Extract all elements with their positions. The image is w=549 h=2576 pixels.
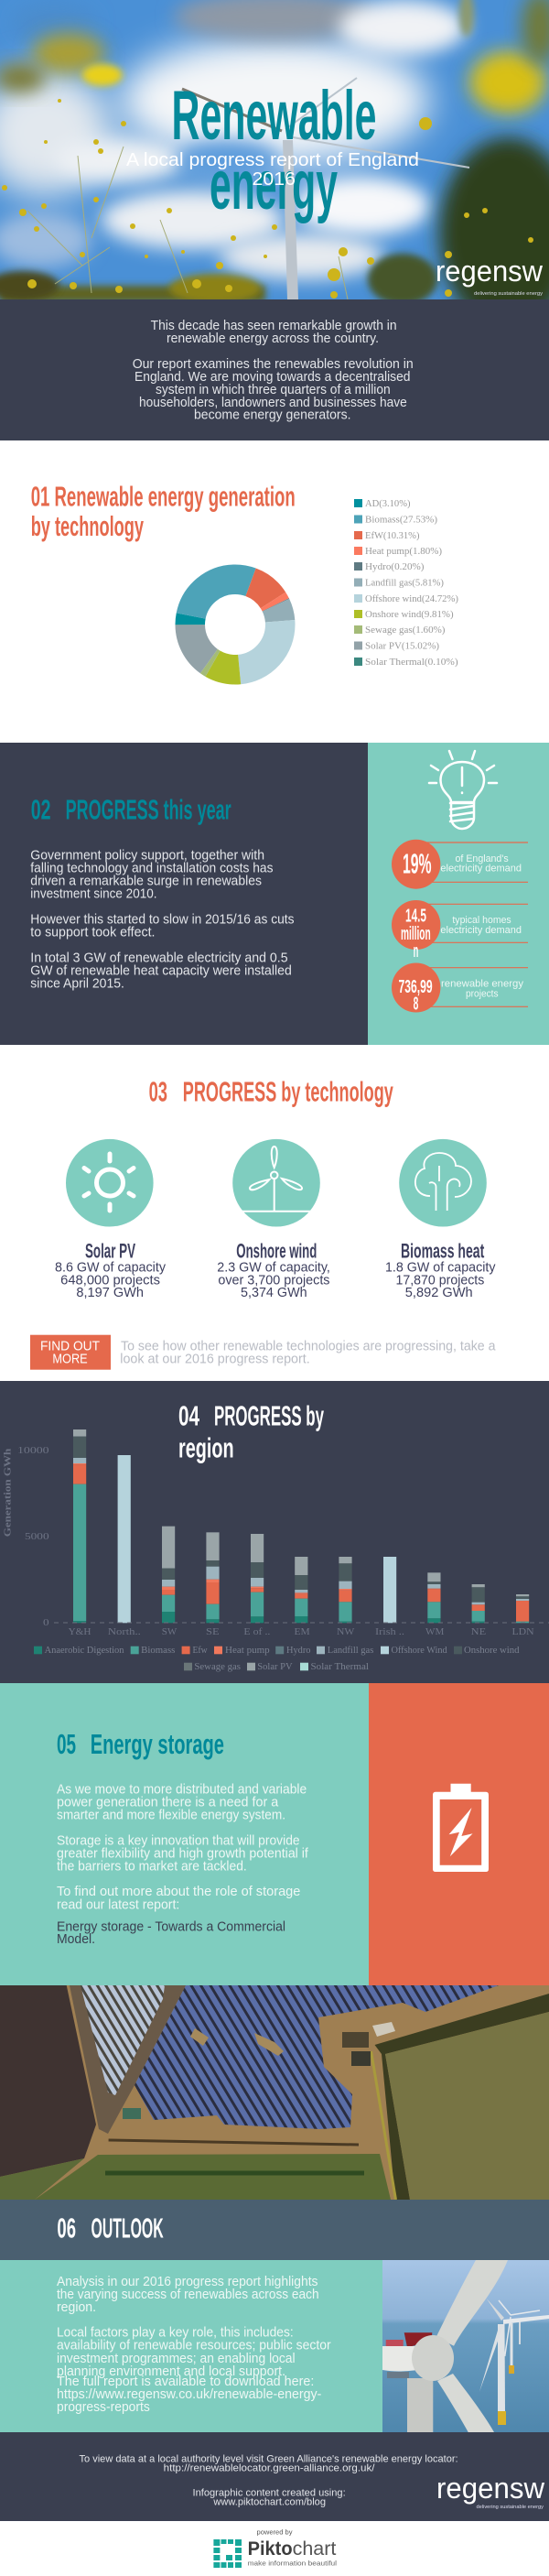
body text 02: falling technology and installation costs has xyxy=(30,862,274,876)
chart legend: Anaerobic Digestion xyxy=(45,1646,124,1656)
piktochart badge: powered by xyxy=(256,2527,293,2536)
tagline: make information beautiful xyxy=(248,2560,337,2568)
body text 06: investment programmes; an enabling local xyxy=(57,2352,296,2366)
panel: 06 outlook text xyxy=(0,2260,382,2432)
icon: sun xyxy=(66,1139,154,1226)
chart legend: Efw xyxy=(192,1646,208,1656)
stat block: Biomass heat: 17,870 projects xyxy=(395,1273,484,1288)
icon: battery with bolt xyxy=(433,1784,489,1872)
heading 01 xyxy=(31,481,296,542)
heading 02: PROGRESS this year xyxy=(66,793,231,825)
panel: footer xyxy=(0,2432,549,2521)
stat block: Solar PV: Solar PV xyxy=(85,1239,135,1262)
stat: 736,998: 8 xyxy=(414,995,418,1015)
stat block: Solar PV xyxy=(55,1239,167,1300)
panel: 04 progress by region xyxy=(0,1381,549,1683)
logo: regensw on hero: regensw xyxy=(436,255,544,288)
intro text: Our report examines the renewables revolution in xyxy=(133,357,414,372)
donut legend: AD(3.10%) xyxy=(365,499,410,509)
donut legend: Onshore wind(9.81%) xyxy=(365,610,454,620)
heading 06: 06 xyxy=(57,2212,76,2244)
title: Renewable: Renewable xyxy=(172,77,377,155)
find out more text xyxy=(120,1339,496,1366)
intro text: England. We are moving towards a decentralised xyxy=(135,370,410,385)
subtitle line: A local progress report of England xyxy=(126,150,419,170)
stat block: Onshore wind: 2.3 GW of capacity, xyxy=(217,1260,330,1275)
stat block: Solar PV: 8.6 GW of capacity xyxy=(55,1260,167,1275)
piktochart badge: chart xyxy=(293,2538,337,2560)
heading 04: region xyxy=(178,1432,234,1464)
donut legend: Landfill gas(5.81%) xyxy=(365,579,444,588)
stat: 14.5 million: million xyxy=(401,924,431,944)
body text 05: the barriers to market are tackled. xyxy=(57,1859,247,1874)
find out more text: To see how other renewable technologies are progressing, take a xyxy=(121,1339,496,1353)
body text 06: Analysis in our 2016 progress report highlights xyxy=(57,2275,318,2289)
credit text xyxy=(192,2488,346,2508)
body text 02: since April 2015. xyxy=(30,977,124,992)
x axis labels: SE xyxy=(206,1626,220,1637)
donut legend xyxy=(354,499,458,668)
donut legend: Heat pump(1.80%) xyxy=(365,547,442,557)
stat: 736,998: 736,99 xyxy=(399,977,433,997)
x axis labels: EM xyxy=(295,1626,310,1637)
heading 05: 05 xyxy=(57,1728,76,1760)
body text 05 xyxy=(57,1782,309,1912)
donut legend: Solar Thermal(0.10%) xyxy=(365,658,458,668)
chart legend: Biomass xyxy=(141,1646,176,1656)
heading 05 xyxy=(57,1728,224,1760)
panel: 02 progress this year xyxy=(0,743,368,1045)
logo: regensw footer: regensw xyxy=(436,2472,545,2505)
report link text: Model. xyxy=(57,1932,95,1947)
body text 02: GW of renewable heat capacity were installed xyxy=(30,964,292,979)
heading 02: 02 xyxy=(31,793,51,825)
intro text: renewable energy across the country. xyxy=(167,332,379,346)
panel: 05 energy storage xyxy=(0,1683,369,1985)
heading 04: 04 xyxy=(178,1400,200,1432)
stat: 14.5 million xyxy=(392,900,528,962)
body text 06: the varying success of renewables across each xyxy=(57,2288,319,2302)
stat block: Solar PV: 8,197 GWh xyxy=(76,1286,144,1300)
body text 05: greater flexibility and high growth potential if xyxy=(57,1846,309,1861)
icon: tree xyxy=(399,1139,487,1226)
y axis labels: 10000 xyxy=(17,1445,49,1456)
panel: 01 generation by technology xyxy=(0,440,549,743)
body text 05: As we move to more distributed and variable xyxy=(57,1782,307,1797)
chart legend: Onshore wind xyxy=(464,1646,520,1656)
stat: 736,998 xyxy=(392,963,528,1015)
bars xyxy=(73,1429,529,1623)
x axis labels: WM xyxy=(425,1626,445,1637)
chart legend: Heat pump xyxy=(225,1646,270,1656)
donut chart xyxy=(190,580,280,669)
panel: intro xyxy=(0,299,549,440)
stat: 736,998: renewable energy xyxy=(441,978,524,989)
hero title xyxy=(126,77,419,224)
body text 06: progress-reports xyxy=(57,2400,150,2415)
button: find out more xyxy=(30,1335,111,1370)
x axis labels: NW xyxy=(337,1626,355,1637)
credit text: Infographic content created using: xyxy=(192,2488,346,2499)
body text 02: Government policy support, together with xyxy=(30,848,264,863)
donut legend: Solar PV(15.02%) xyxy=(365,641,439,652)
stat: 14.5 million: 14.5 xyxy=(405,907,426,927)
locator text: To view data at a local authority level visit Green Alliance's renewable energy locator: xyxy=(79,2453,458,2464)
stat: 19%: of England's xyxy=(456,853,509,864)
body text 05: Storage is a key innovation that will provide xyxy=(57,1833,300,1848)
title: energy: energy xyxy=(210,147,338,224)
y axis labels: Generation GWh xyxy=(2,1449,13,1537)
body text 05: smarter and more flexible energy system. xyxy=(57,1808,285,1822)
stat block: Onshore wind: Onshore wind xyxy=(236,1239,317,1262)
heading 02 xyxy=(31,793,231,825)
intro text: This decade has seen remarkable growth in xyxy=(151,319,397,333)
icon: light bulb xyxy=(429,751,497,829)
chart legend xyxy=(34,1646,520,1672)
body text 02: In total 3 GW of renewable electricity and 0.5 xyxy=(30,951,288,966)
find out more text: look at our 2016 progress report. xyxy=(120,1352,310,1366)
x axis labels: Y&H xyxy=(69,1626,92,1637)
button: find out more: MORE xyxy=(52,1352,88,1366)
stat block: Onshore wind: 5,374 GWh xyxy=(241,1286,307,1300)
body text 06: planning environment and local support. xyxy=(57,2364,285,2379)
stat block: Onshore wind xyxy=(217,1239,330,1300)
y axis labels xyxy=(2,1445,49,1628)
panel: 02 key statistics xyxy=(368,743,549,1045)
locator text xyxy=(79,2453,458,2473)
body text 05: power generation there is a need for a xyxy=(57,1795,279,1810)
body text 06: availability of renewable resources; public sector xyxy=(57,2339,331,2353)
panel: 03 progress by technology xyxy=(0,1045,549,1381)
stat: 19%: electricity demand xyxy=(440,864,522,875)
locator text: http://renewablelocator.green-alliance.org.uk/ xyxy=(164,2462,375,2473)
x axis labels: E of .. xyxy=(243,1626,271,1637)
x axis labels xyxy=(69,1626,534,1637)
stat: 14.5 million: n xyxy=(414,941,418,962)
donut legend: Biomass(27.53%) xyxy=(365,515,437,526)
chart legend: Sewage gas xyxy=(194,1662,241,1672)
logo: regensw footer: delivering sustainable energy xyxy=(476,2505,544,2510)
intro text: system in which three quarters of a million xyxy=(156,383,391,397)
heading 05: Energy storage xyxy=(91,1728,224,1760)
stacked bar chart xyxy=(2,1429,549,1672)
stat: 736,998: projects xyxy=(466,988,499,999)
donut legend: Offshore wind(24.72%) xyxy=(365,594,458,604)
subtitle year: 2016 xyxy=(253,169,296,190)
chart legend: Solar PV xyxy=(257,1662,293,1672)
body text 02: However this started to slow in 2015/16 as cuts xyxy=(30,912,295,927)
report link text: Energy storage - Towards a Commercial xyxy=(57,1919,285,1934)
piktochart badge xyxy=(213,2527,337,2568)
x axis labels: Irish .. xyxy=(375,1626,404,1637)
credit text: www.piktochart.com/blog xyxy=(212,2497,326,2508)
heading 06 xyxy=(57,2212,164,2244)
body text 02: to support took effect. xyxy=(30,926,155,940)
stat: 14.5 million: electricity demand xyxy=(440,925,522,936)
intro text: become energy generators. xyxy=(194,408,351,423)
intro text: householders, landowners and businesses have xyxy=(139,396,407,410)
button: find out more: FIND OUT xyxy=(40,1339,100,1353)
stat block: Biomass heat: 1.8 GW of capacity xyxy=(385,1260,496,1275)
y axis labels: 5000 xyxy=(25,1531,49,1542)
body text 02: driven a remarkable surge in renewables xyxy=(30,875,262,889)
donut legend: Sewage gas(1.60%) xyxy=(365,625,445,636)
logo: regensw on hero: delivering sustainable energy xyxy=(474,291,544,297)
body text 02 xyxy=(30,848,295,992)
x axis labels: LDN xyxy=(512,1626,534,1637)
heading 03: PROGRESS by technology xyxy=(183,1076,393,1108)
stat: 14.5 million: typical homes xyxy=(452,915,511,926)
heading 04 xyxy=(178,1400,324,1464)
body text 06: https://www.regensw.co.uk/renewable-energy- xyxy=(57,2387,321,2402)
panel: battery xyxy=(369,1683,549,1985)
hero photo: wind turbine and yellow flowers xyxy=(0,0,549,330)
x axis labels: North.. xyxy=(108,1626,141,1637)
intro text xyxy=(133,319,414,423)
icon: piktochart grid xyxy=(213,2539,242,2568)
body text 06: region. xyxy=(57,2300,96,2315)
heading 03 xyxy=(149,1076,393,1108)
report link text xyxy=(57,1919,285,1947)
body text 05: read our latest report: xyxy=(57,1897,179,1912)
photo: offshore wind turbines xyxy=(382,2260,549,2432)
heading 06: OUTLOOK xyxy=(92,2212,164,2244)
stat block: Onshore wind: over 3,700 projects xyxy=(218,1273,329,1288)
heading 01: 01 Renewable energy generation xyxy=(31,481,296,513)
stat block: Biomass heat xyxy=(385,1239,496,1300)
body text 06: The full report is available to download here: xyxy=(57,2375,314,2389)
chart legend: Landfill gas xyxy=(328,1646,373,1656)
x axis labels: SW xyxy=(162,1626,178,1637)
photo: aerial solar farm xyxy=(0,1985,549,2200)
heading 01: by technology xyxy=(31,510,144,542)
body text 06 xyxy=(57,2275,331,2415)
stat: 19%: 19% xyxy=(403,847,432,879)
heading 03: 03 xyxy=(149,1076,167,1108)
chart legend: Hydro xyxy=(286,1646,311,1656)
heading 04: PROGRESS by xyxy=(214,1400,324,1432)
body text 06: Local factors play a key role, this includes: xyxy=(57,2326,294,2341)
y axis labels: 0 xyxy=(43,1617,49,1628)
icon: wind turbine xyxy=(232,1139,320,1226)
chart legend: Solar Thermal xyxy=(311,1662,369,1672)
body text 02: investment since 2010. xyxy=(30,887,156,902)
stat block: Biomass heat: 5,892 GWh xyxy=(405,1286,473,1300)
stat: 19% xyxy=(392,840,528,889)
chart legend: Offshore Wind xyxy=(392,1646,447,1656)
donut legend: EfW(10.31%) xyxy=(365,531,419,541)
x axis labels: NE xyxy=(471,1626,487,1637)
panel: 06 outlook heading band xyxy=(0,2200,549,2260)
body text 05: To find out more about the role of storage xyxy=(57,1885,300,1899)
donut legend: Hydro(0.20%) xyxy=(365,562,425,572)
stat block: Solar PV: 648,000 projects xyxy=(60,1273,160,1288)
wordmark: Pikto xyxy=(248,2538,293,2560)
stat block: Biomass heat: Biomass heat xyxy=(401,1239,485,1262)
